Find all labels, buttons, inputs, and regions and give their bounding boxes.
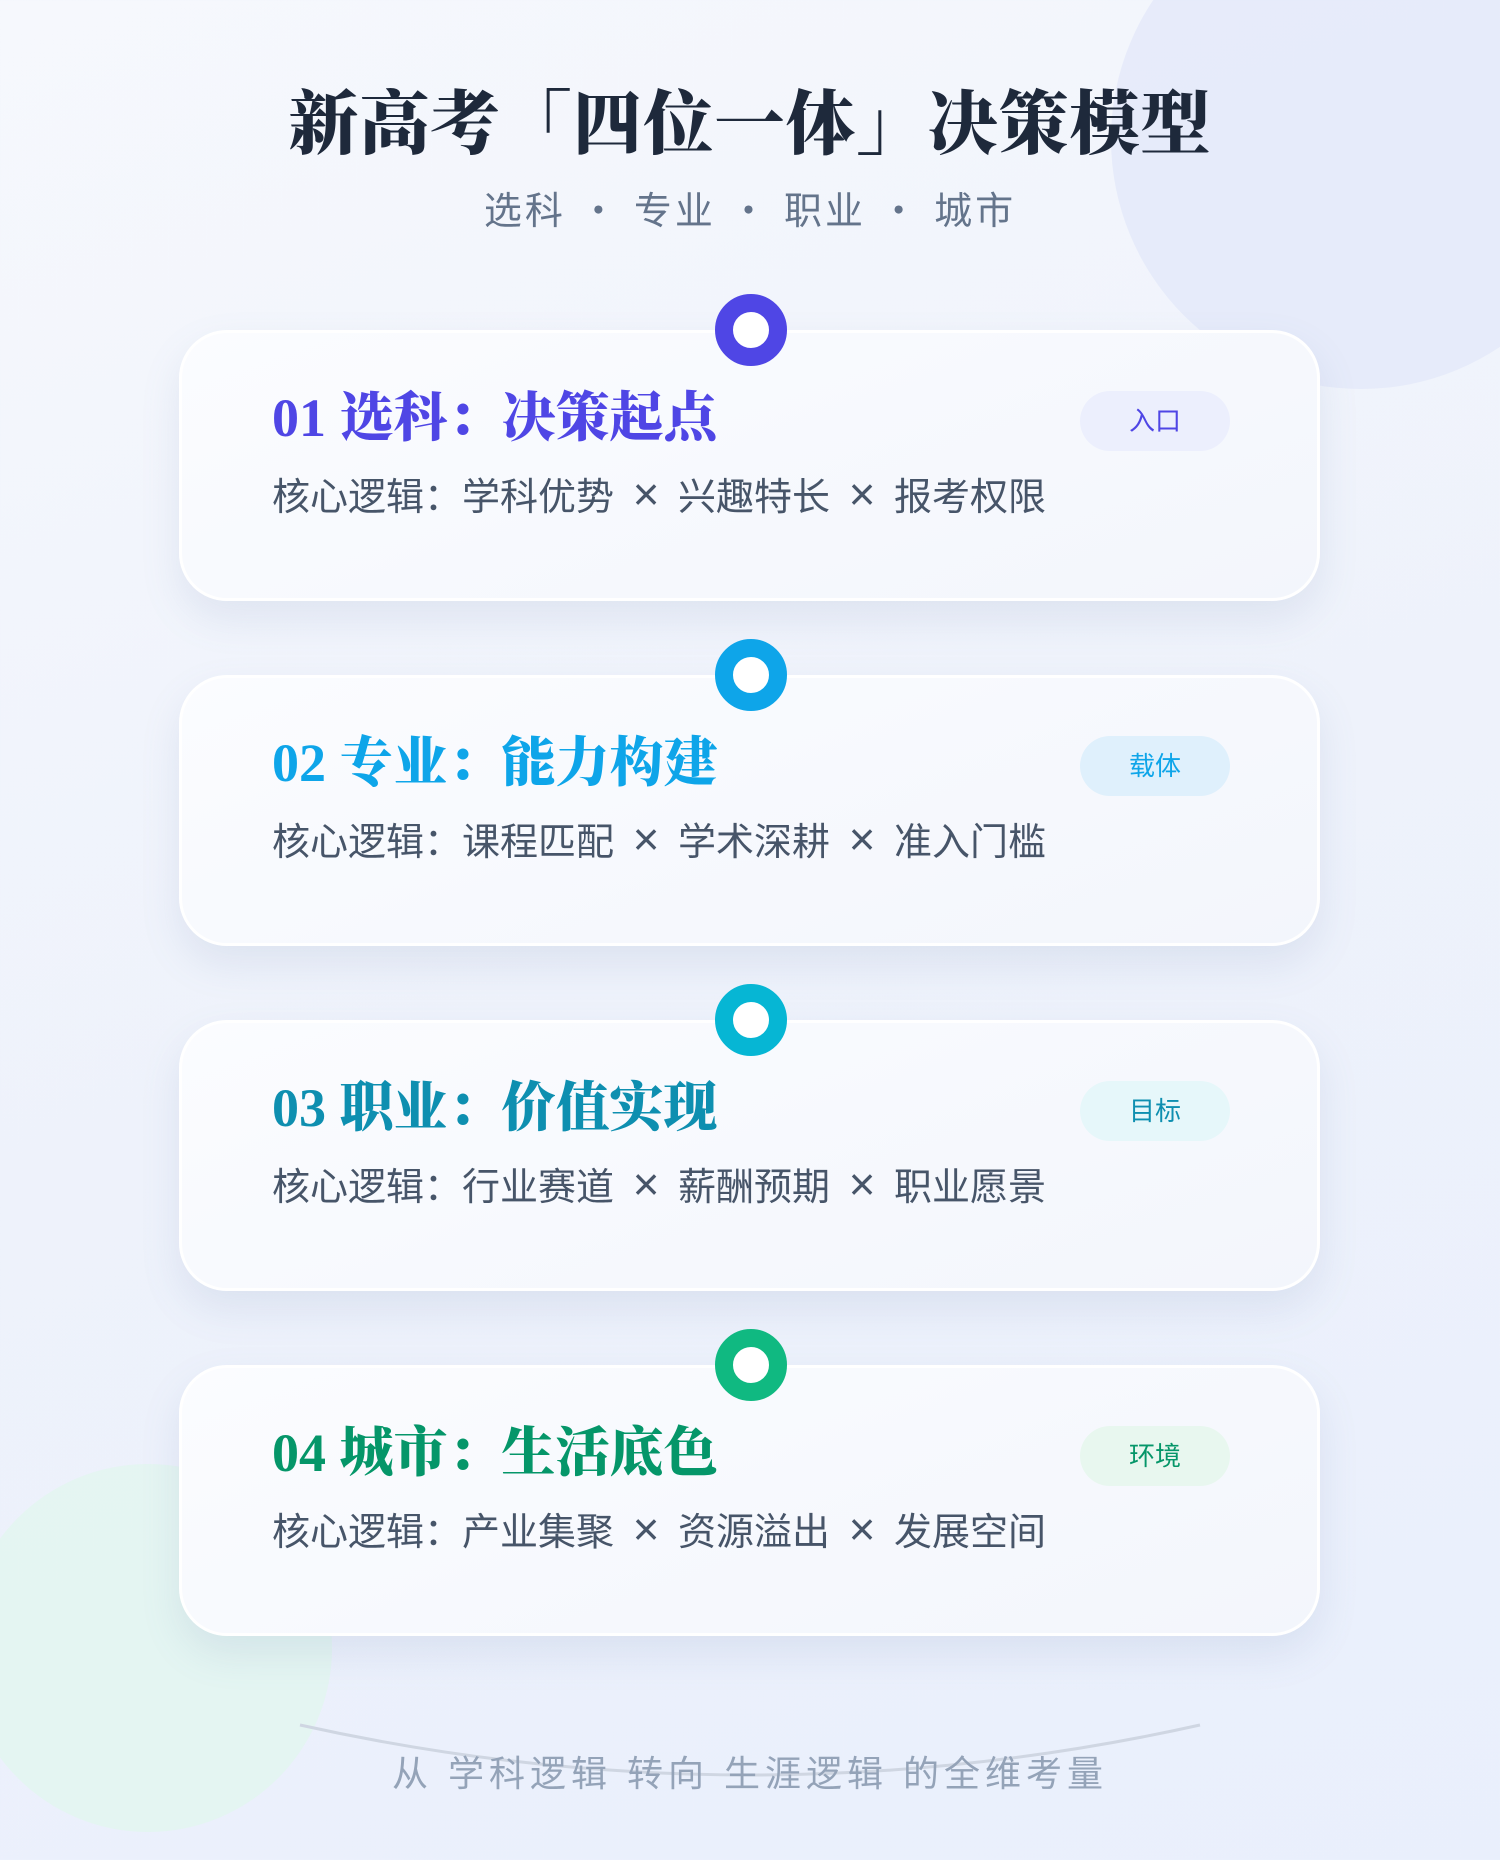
footer arc — [300, 1724, 1200, 1776]
heading 04: 04 城市：生活底色 — [272, 1423, 718, 1483]
icon: ring 02 — [715, 639, 787, 711]
badge 入口 — [1080, 391, 1230, 451]
footer text: 从 学科逻辑 转向 生涯逻辑 的全维考量 — [392, 1753, 1108, 1794]
heading 01: 01 选科：决策起点 — [272, 388, 718, 448]
subtitle: 选科 ・ 专业 ・ 职业 ・ 城市 — [484, 191, 1016, 233]
badge 载体: 载体 — [1129, 751, 1181, 781]
panel: 01 选科 — [179, 330, 1320, 601]
badge 载体 — [1080, 736, 1230, 796]
heading 02: 02 专业：能力构建 — [272, 733, 718, 793]
body 02: × — [633, 813, 659, 865]
panel: 03 职业 — [179, 1020, 1320, 1291]
body 01: × — [633, 468, 659, 520]
body 02: 核心逻辑：课程匹配 学术深耕 准入门槛 — [272, 822, 1046, 864]
icon: ring 03 — [715, 984, 787, 1056]
panel: 02 专业 — [179, 675, 1320, 946]
icon: ring 01 — [715, 294, 787, 366]
body 02: × — [849, 813, 875, 865]
title: 新高考「四位一体」决策模型 — [288, 87, 1212, 164]
body 01: 核心逻辑：学科优势 兴趣特长 报考权限 — [272, 477, 1046, 519]
badge 入口: 入口 — [1129, 406, 1181, 436]
badge 目标: 目标 — [1129, 1096, 1181, 1126]
badge 目标 — [1080, 1081, 1230, 1141]
body 03: 核心逻辑：行业赛道 薪酬预期 职业愿景 — [272, 1167, 1046, 1209]
icon: ring 04 — [715, 1329, 787, 1401]
body 04: × — [633, 1503, 659, 1555]
body 03: × — [633, 1158, 659, 1210]
body 03: × — [849, 1158, 875, 1210]
body 04: × — [849, 1503, 875, 1555]
heading 03: 03 职业：价值实现 — [272, 1078, 718, 1138]
body 04: 核心逻辑：产业集聚 资源溢出 发展空间 — [272, 1512, 1046, 1554]
panel: 04 城市 — [179, 1365, 1320, 1636]
badge 环境 — [1080, 1426, 1230, 1486]
body 01: × — [849, 468, 875, 520]
badge 环境: 环境 — [1129, 1441, 1181, 1471]
